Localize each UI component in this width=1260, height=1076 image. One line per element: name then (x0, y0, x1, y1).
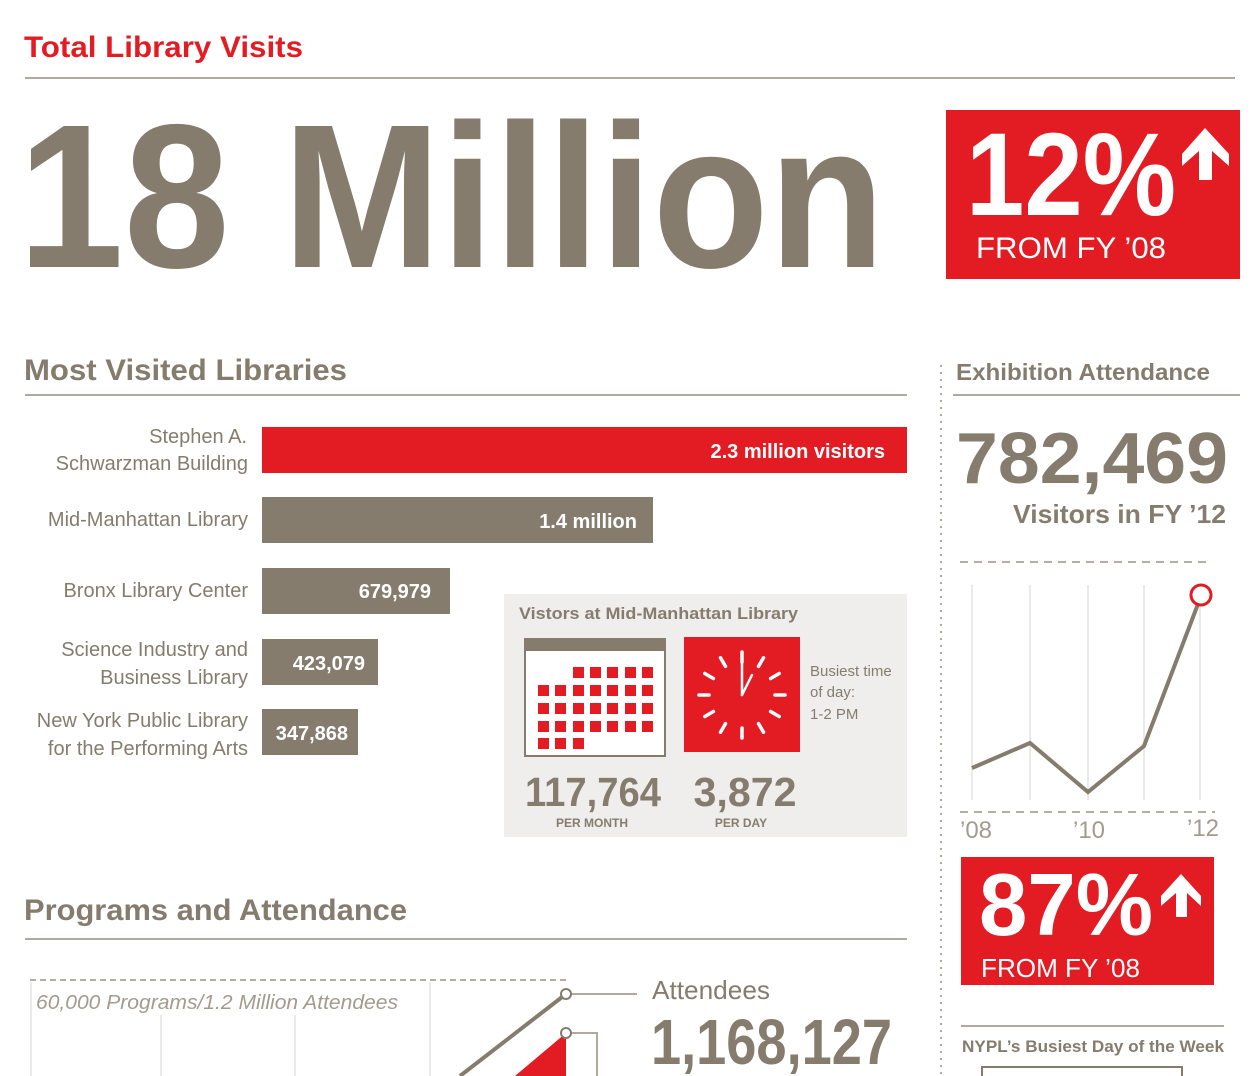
stat: exhibition visitors: Visitors in FY ’12 (1013, 499, 1226, 529)
stat: attendees (651, 975, 892, 1076)
stat: per day: 3,872 (694, 769, 796, 815)
bar: Bronx: 679,979 (359, 581, 431, 603)
bar: SIBL (61, 639, 378, 689)
bar chart: most visited (37, 426, 907, 760)
stat: exhibition visitors: 782,469 (956, 419, 1228, 499)
text: busiest time: of day: (810, 684, 855, 701)
bar: LPA: New York Public Library (37, 710, 248, 732)
bar: Mid-Manhattan (48, 497, 653, 543)
text: busiest time (810, 663, 892, 723)
heading: busiest day: NYPL’s Busiest Day of the Week (962, 1037, 1225, 1056)
heading: busiest day (961, 1025, 1225, 1076)
bar: Schwarzman: Schwarzman Building (56, 453, 248, 475)
title: Total Library Visits (24, 31, 303, 64)
panel: Mid-Manhattan visitors: Vistors at Mid-Manhattan Library (519, 604, 799, 623)
callout: 87% from FY08 (961, 855, 1214, 985)
bar: Bronx (63, 568, 450, 614)
bar: LPA (37, 709, 358, 760)
chart: programs: 60,000 Programs/1.2 Million Attendees (36, 992, 398, 1014)
icon: calendar (524, 638, 666, 756)
line chart: exhibition attendance: ’12 (1187, 815, 1219, 842)
line chart: exhibition attendance (960, 562, 1219, 844)
heading: Most Visited Libraries: Most Visited Libraries (24, 354, 347, 387)
line chart: exhibition attendance: ’08 (960, 817, 992, 844)
stat: attendees: 1,168,127 (651, 1006, 892, 1076)
line chart: exhibition attendance: ’10 (1073, 817, 1105, 844)
icon: clock (684, 637, 800, 752)
stat: exhibition visitors (956, 419, 1228, 529)
panel: Mid-Manhattan visitors (504, 594, 907, 837)
stat: per month: PER MONTH (556, 816, 628, 830)
callout: 12% from FY08 (946, 109, 1240, 279)
bar: Bronx: Bronx Library Center (63, 580, 248, 602)
callout: 12% from FY08: 12% (966, 109, 1176, 241)
bar: Schwarzman: Stephen A. (149, 426, 247, 448)
stat: attendees: Attendees (652, 975, 770, 1005)
text: busiest time: 1-2 PM (810, 706, 858, 723)
text: busiest time: Busiest time (810, 663, 892, 680)
bar: LPA: for the Performing Arts (48, 738, 248, 760)
stat: per day: PER DAY (715, 816, 767, 830)
bar: Mid-Manhattan: Mid-Manhattan Library (48, 509, 248, 531)
chart: programs (30, 980, 637, 1076)
bar: Mid-Manhattan: 1.4 million (539, 511, 637, 533)
heading: Programs and Attendance: Programs and Attendance (24, 894, 407, 927)
heading: Exhibition Attendance: Exhibition Attendance (956, 359, 1210, 385)
bar: SIBL: Business Library (100, 667, 248, 689)
callout: 87% from FY08: 87% (979, 855, 1153, 954)
callout: 12% from FY08: FROM FY ’08 (976, 232, 1166, 265)
bar: LPA: 347,868 (276, 723, 348, 745)
bar: SIBL: 423,079 (293, 653, 365, 675)
bar: Schwarzman: 2.3 million visitors (710, 441, 885, 463)
divider: dotted vertical (940, 365, 942, 1076)
bar: Schwarzman (56, 426, 907, 475)
bar: SIBL: Science Industry and (61, 639, 248, 661)
stat: per month: 117,764 (525, 769, 661, 815)
callout: 87% from FY08: FROM FY ’08 (981, 953, 1140, 983)
big number: 18 Million: 18 Million (18, 82, 885, 311)
